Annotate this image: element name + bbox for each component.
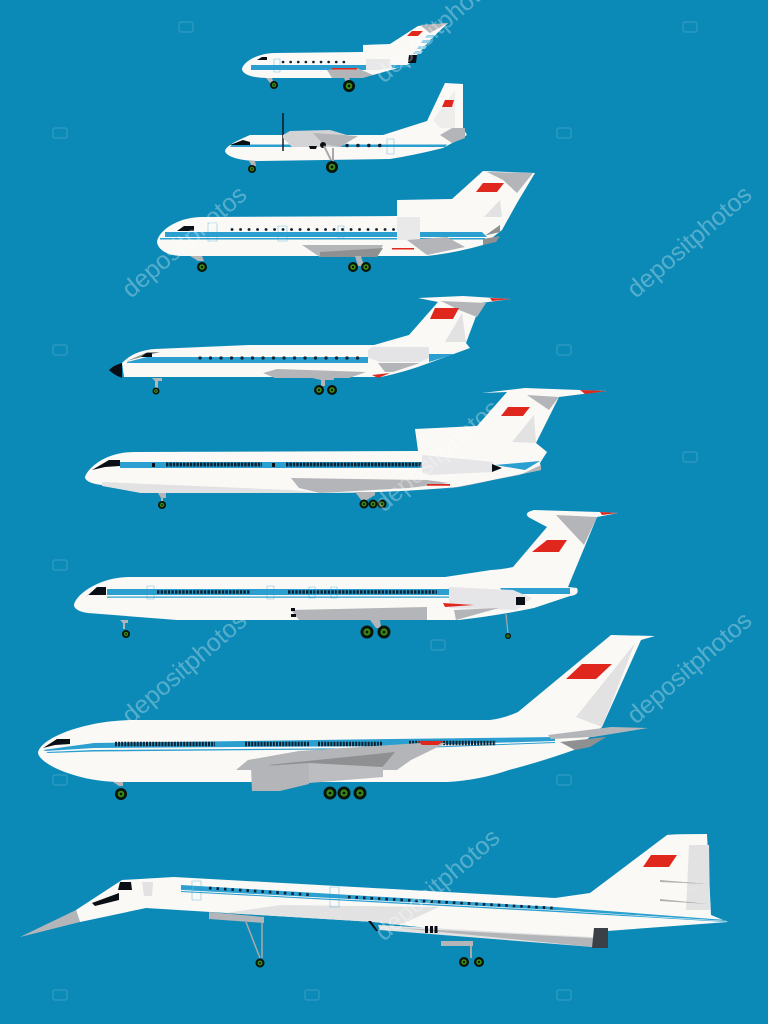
watermark text: depositphotos (622, 606, 757, 730)
tail flag (501, 407, 530, 416)
plane: Tu-144 supersonic (20, 834, 728, 968)
plane: Yak-42 (157, 171, 535, 272)
watermark text: depositphotos (370, 394, 505, 518)
watermark text: depositphotos (117, 180, 252, 304)
propeller and engine (282, 113, 284, 151)
plane: Il-62 (74, 510, 618, 639)
tail flag (566, 664, 612, 679)
watermark text: depositphotos (622, 180, 757, 304)
tail flag (430, 308, 459, 319)
tail flag (532, 540, 567, 552)
plane: Tu-134 (109, 296, 511, 395)
watermark text: depositphotos (370, 823, 505, 947)
plane: An-24 turboprop (225, 83, 467, 173)
plane: Il-86 wide body (38, 635, 655, 800)
plane: Tu-154 (85, 388, 607, 509)
watermark text: depositphotos (117, 606, 252, 730)
watermark text (117, 0, 757, 947)
plane: Yak-40 small trijet (242, 23, 448, 92)
tail flag (476, 183, 504, 192)
tail flag (407, 31, 423, 36)
tail flag (643, 855, 677, 867)
